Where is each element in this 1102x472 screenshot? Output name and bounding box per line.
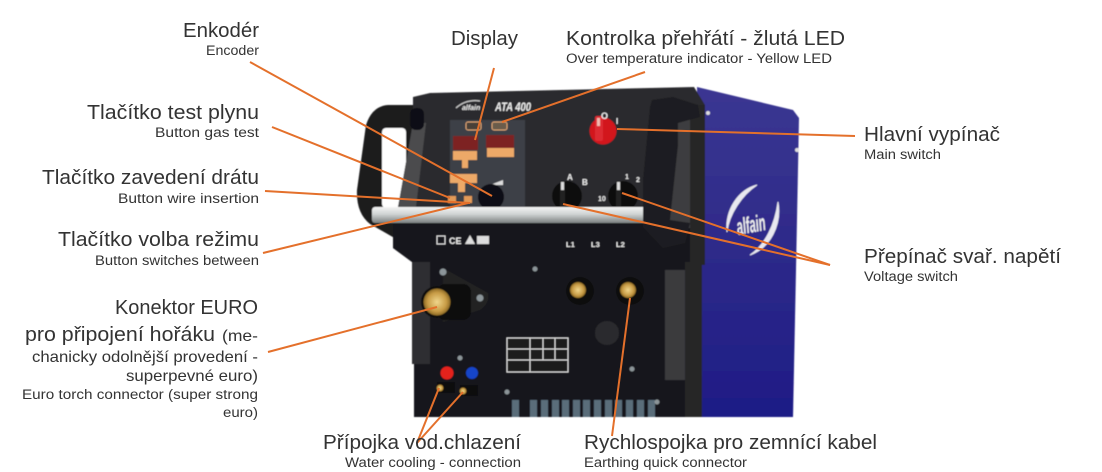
label: Přípojka vod.chlazení: Přípojka vod.chlazení [323, 432, 521, 454]
logo: alfain on side panel: alfain [734, 209, 767, 240]
cooling vents [512, 400, 655, 417]
label: Kontrolka přehřátí [566, 28, 845, 66]
red displays [453, 136, 478, 150]
encoder knob [478, 180, 504, 210]
earth socket right [616, 277, 644, 305]
label: Enkodér [183, 20, 260, 58]
label: Tlačítko test plynu: Button gas test [155, 125, 259, 140]
wiring table plate [507, 338, 568, 372]
EURO torch connector [421, 268, 488, 322]
model label [456, 101, 531, 114]
label: Konektor EURO: Euro torch connector (super strong [22, 387, 258, 402]
voltage switch A/B [552, 173, 588, 211]
label: Tlačítko volba režimu: Button switches between [95, 253, 259, 268]
main switch: red: I [616, 117, 618, 126]
grey strip behind right handle [668, 118, 705, 228]
band under bar [393, 223, 704, 262]
label: Display: Display [451, 28, 518, 50]
label: Tlačítko test plynu: Tlačítko test plynu [87, 102, 259, 124]
label: Přípojka vod.chlazení: Water cooling - connection [345, 455, 521, 470]
orange button fields [453, 151, 477, 160]
label: Přípojka vod.chlazení [323, 432, 521, 470]
main switch: red [590, 111, 618, 144]
main switch: red: O [601, 111, 608, 121]
voltage switch A/B: A [567, 173, 573, 182]
label: Tlačítko test plynu [87, 102, 259, 140]
label: Konektor EURO: superpevné euro) [126, 368, 258, 385]
side rails on lower front panel [412, 250, 702, 417]
label: Kontrolka přehřátí: Over temperature indicator - Yellow LED [566, 51, 832, 66]
label: Konektor EURO: (me- [222, 328, 258, 345]
marks: safety labels: CE [449, 236, 462, 246]
voltage switch 1-10: 2 [636, 177, 640, 184]
label: Kontrolka přehřátí: Kontrolka přehřátí - žlutá LED [566, 28, 845, 50]
label: Tlačítko volba režimu [58, 229, 259, 268]
label: Konektor EURO: chanicky odolnější provedení - [32, 349, 258, 366]
model label: ATA 400 [494, 102, 531, 114]
phase labels [566, 240, 625, 249]
phase labels: L2 [616, 240, 625, 249]
label: Hlavní vypínač: Main switch [864, 147, 941, 162]
model label: alfain [462, 105, 480, 112]
voltage switch A/B: B [582, 178, 588, 187]
blind plug [595, 321, 619, 345]
phase labels: L1 [566, 240, 575, 249]
label: Tlačítko zavedení drátu: Tlačítko zavedení drátu [42, 167, 259, 189]
label: Konektor EURO: Konektor EURO [115, 297, 258, 319]
label: Tlačítko volba režimu: Tlačítko volba režimu [58, 229, 259, 251]
label: Rychlospojka: Earthing quick connector [584, 455, 748, 470]
label: Tlačítko zavedení drátu [42, 167, 259, 206]
voltage switch 1-10: 1 [625, 174, 629, 181]
label: Konektor EURO: pro připojení hořáku [25, 324, 215, 346]
machine side panel: blue [697, 87, 799, 417]
label: Přepínač svař. napětí [864, 246, 1061, 284]
welding machine photo [357, 87, 799, 417]
marks: safety labels [437, 235, 489, 246]
label: Hlavní vypínač [864, 124, 1000, 162]
screws [458, 266, 660, 404]
handle end cap [410, 108, 424, 130]
grey strip beside left handle [398, 123, 426, 207]
label: Přepínač svař. napětí: Voltage switch [864, 269, 958, 284]
right handle [643, 97, 700, 248]
logo: alfain on side panel [727, 185, 779, 255]
right side column [690, 105, 705, 265]
voltage switch 1-10 [598, 174, 640, 211]
cooling ports [436, 366, 478, 396]
left handle [357, 105, 425, 240]
voltage switch 1-10: 10 [598, 196, 606, 203]
label: Enkodér: Enkodér [183, 20, 259, 42]
earth socket left [566, 277, 594, 305]
machine upper front panel [393, 87, 705, 262]
leader lines [250, 62, 855, 443]
label: Přepínač svař. napětí: Přepínač svař. napětí [864, 246, 1061, 268]
phase labels: L3 [591, 240, 600, 249]
label: Tlačítko zavedení drátu: Button wire insertion [118, 191, 259, 206]
label: Rychlospojka: Rychlospojka pro zemnící kabel [584, 432, 877, 454]
label: Konektor EURO [22, 297, 258, 420]
label: Enkodér: Encoder [206, 43, 260, 58]
control panel [448, 120, 525, 208]
machine lower front panel [414, 250, 702, 417]
label: Hlavní vypínač: Hlavní vypínač [864, 124, 1000, 146]
label: Rychlospojka [584, 432, 877, 470]
silver bar [372, 207, 646, 223]
label: Konektor EURO: euro) [223, 405, 258, 420]
